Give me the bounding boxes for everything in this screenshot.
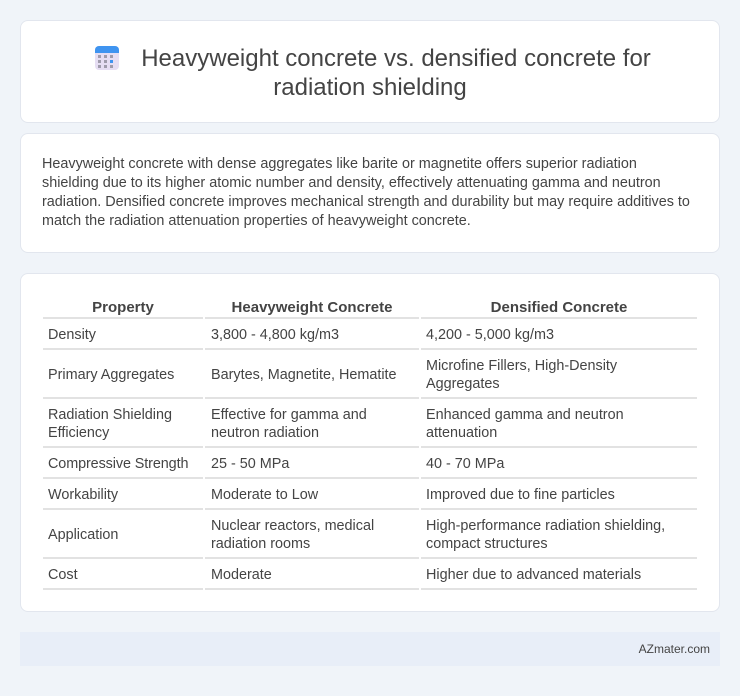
table row: primary aggregates: Microfine Fillers, High-Density (426, 358, 617, 374)
title: Heavyweight concrete vs. densified concrete for (141, 45, 651, 72)
table row: application: Nuclear reactors, medical (211, 518, 374, 534)
table row: application: compact structures (426, 536, 548, 552)
text block: summary paragraph: Heavyweight concrete with dense aggregates like barite or magnetite offers superior radiation (42, 156, 637, 172)
text block: summary paragraph (42, 156, 690, 229)
table row: radiation shielding efficiency: neutron radiation (211, 425, 319, 441)
text block: summary paragraph: radiation. Densified concrete improves mechanical strength and durability but may require additives to (42, 194, 690, 210)
table row: compressive strength: Compressive Strength (48, 456, 188, 472)
table row: application: radiation rooms (211, 536, 310, 552)
table row: radiation shielding efficiency: attenuation (426, 425, 497, 441)
table row: application: Application (48, 527, 118, 543)
table row: density: 3,800 - 4,800 kg/m3 (211, 327, 339, 343)
title: radiation shielding (273, 74, 467, 101)
table header: Densified Concrete (491, 299, 627, 316)
footer credit: AZmater.com (639, 642, 710, 656)
panel: title card (20, 20, 720, 123)
table row: compressive strength: 40 - 70 MPa (426, 456, 504, 472)
text block: summary paragraph: match the radiation attenuation properties of heavyweight concrete. (42, 213, 471, 229)
table row: compressive strength: 25 - 50 MPa (211, 456, 289, 472)
footer bar (20, 632, 720, 666)
table row: density: 4,200 - 5,000 kg/m3 (426, 327, 554, 343)
table row: primary aggregates: Barytes, Magnetite, Hematite (211, 367, 397, 383)
table row: radiation shielding efficiency: Enhanced gamma and neutron (426, 407, 624, 423)
table header: Heavyweight Concrete (232, 299, 392, 316)
table row: application (48, 518, 665, 552)
table row: application: High-performance radiation shielding, (426, 518, 665, 534)
panel: summary card (20, 133, 720, 253)
text block: summary paragraph: shielding due to its higher atomic number and density, effectively attenuating gamma and neutron (42, 175, 661, 191)
table row: cost (48, 567, 641, 583)
title (141, 45, 651, 101)
table row: compressive strength (48, 456, 504, 472)
table row: workability: Improved due to fine particles (426, 487, 615, 503)
table row: primary aggregates (48, 358, 617, 392)
table row: workability: Moderate to Low (211, 487, 318, 503)
table row: cost: Moderate (211, 567, 272, 583)
table header (92, 299, 627, 316)
table row: cost: Cost (48, 567, 78, 583)
table row: radiation shielding efficiency: Effective for gamma and (211, 407, 367, 423)
table row: density: Density (48, 327, 96, 343)
table row: workability: Workability (48, 487, 118, 503)
icon: calendar (95, 46, 119, 70)
table row: radiation shielding efficiency: Efficiency (48, 425, 109, 441)
table row: workability (48, 487, 615, 503)
table row: primary aggregates: Aggregates (426, 376, 500, 392)
table header: Property (92, 299, 154, 316)
table row: radiation shielding efficiency (48, 407, 624, 441)
panel: comparison table card (20, 273, 720, 612)
table row: cost: Higher due to advanced materials (426, 567, 641, 583)
table row: radiation shielding efficiency: Radiation Shielding (48, 407, 172, 423)
table row: density (48, 327, 554, 343)
table row: primary aggregates: Primary Aggregates (48, 367, 174, 383)
